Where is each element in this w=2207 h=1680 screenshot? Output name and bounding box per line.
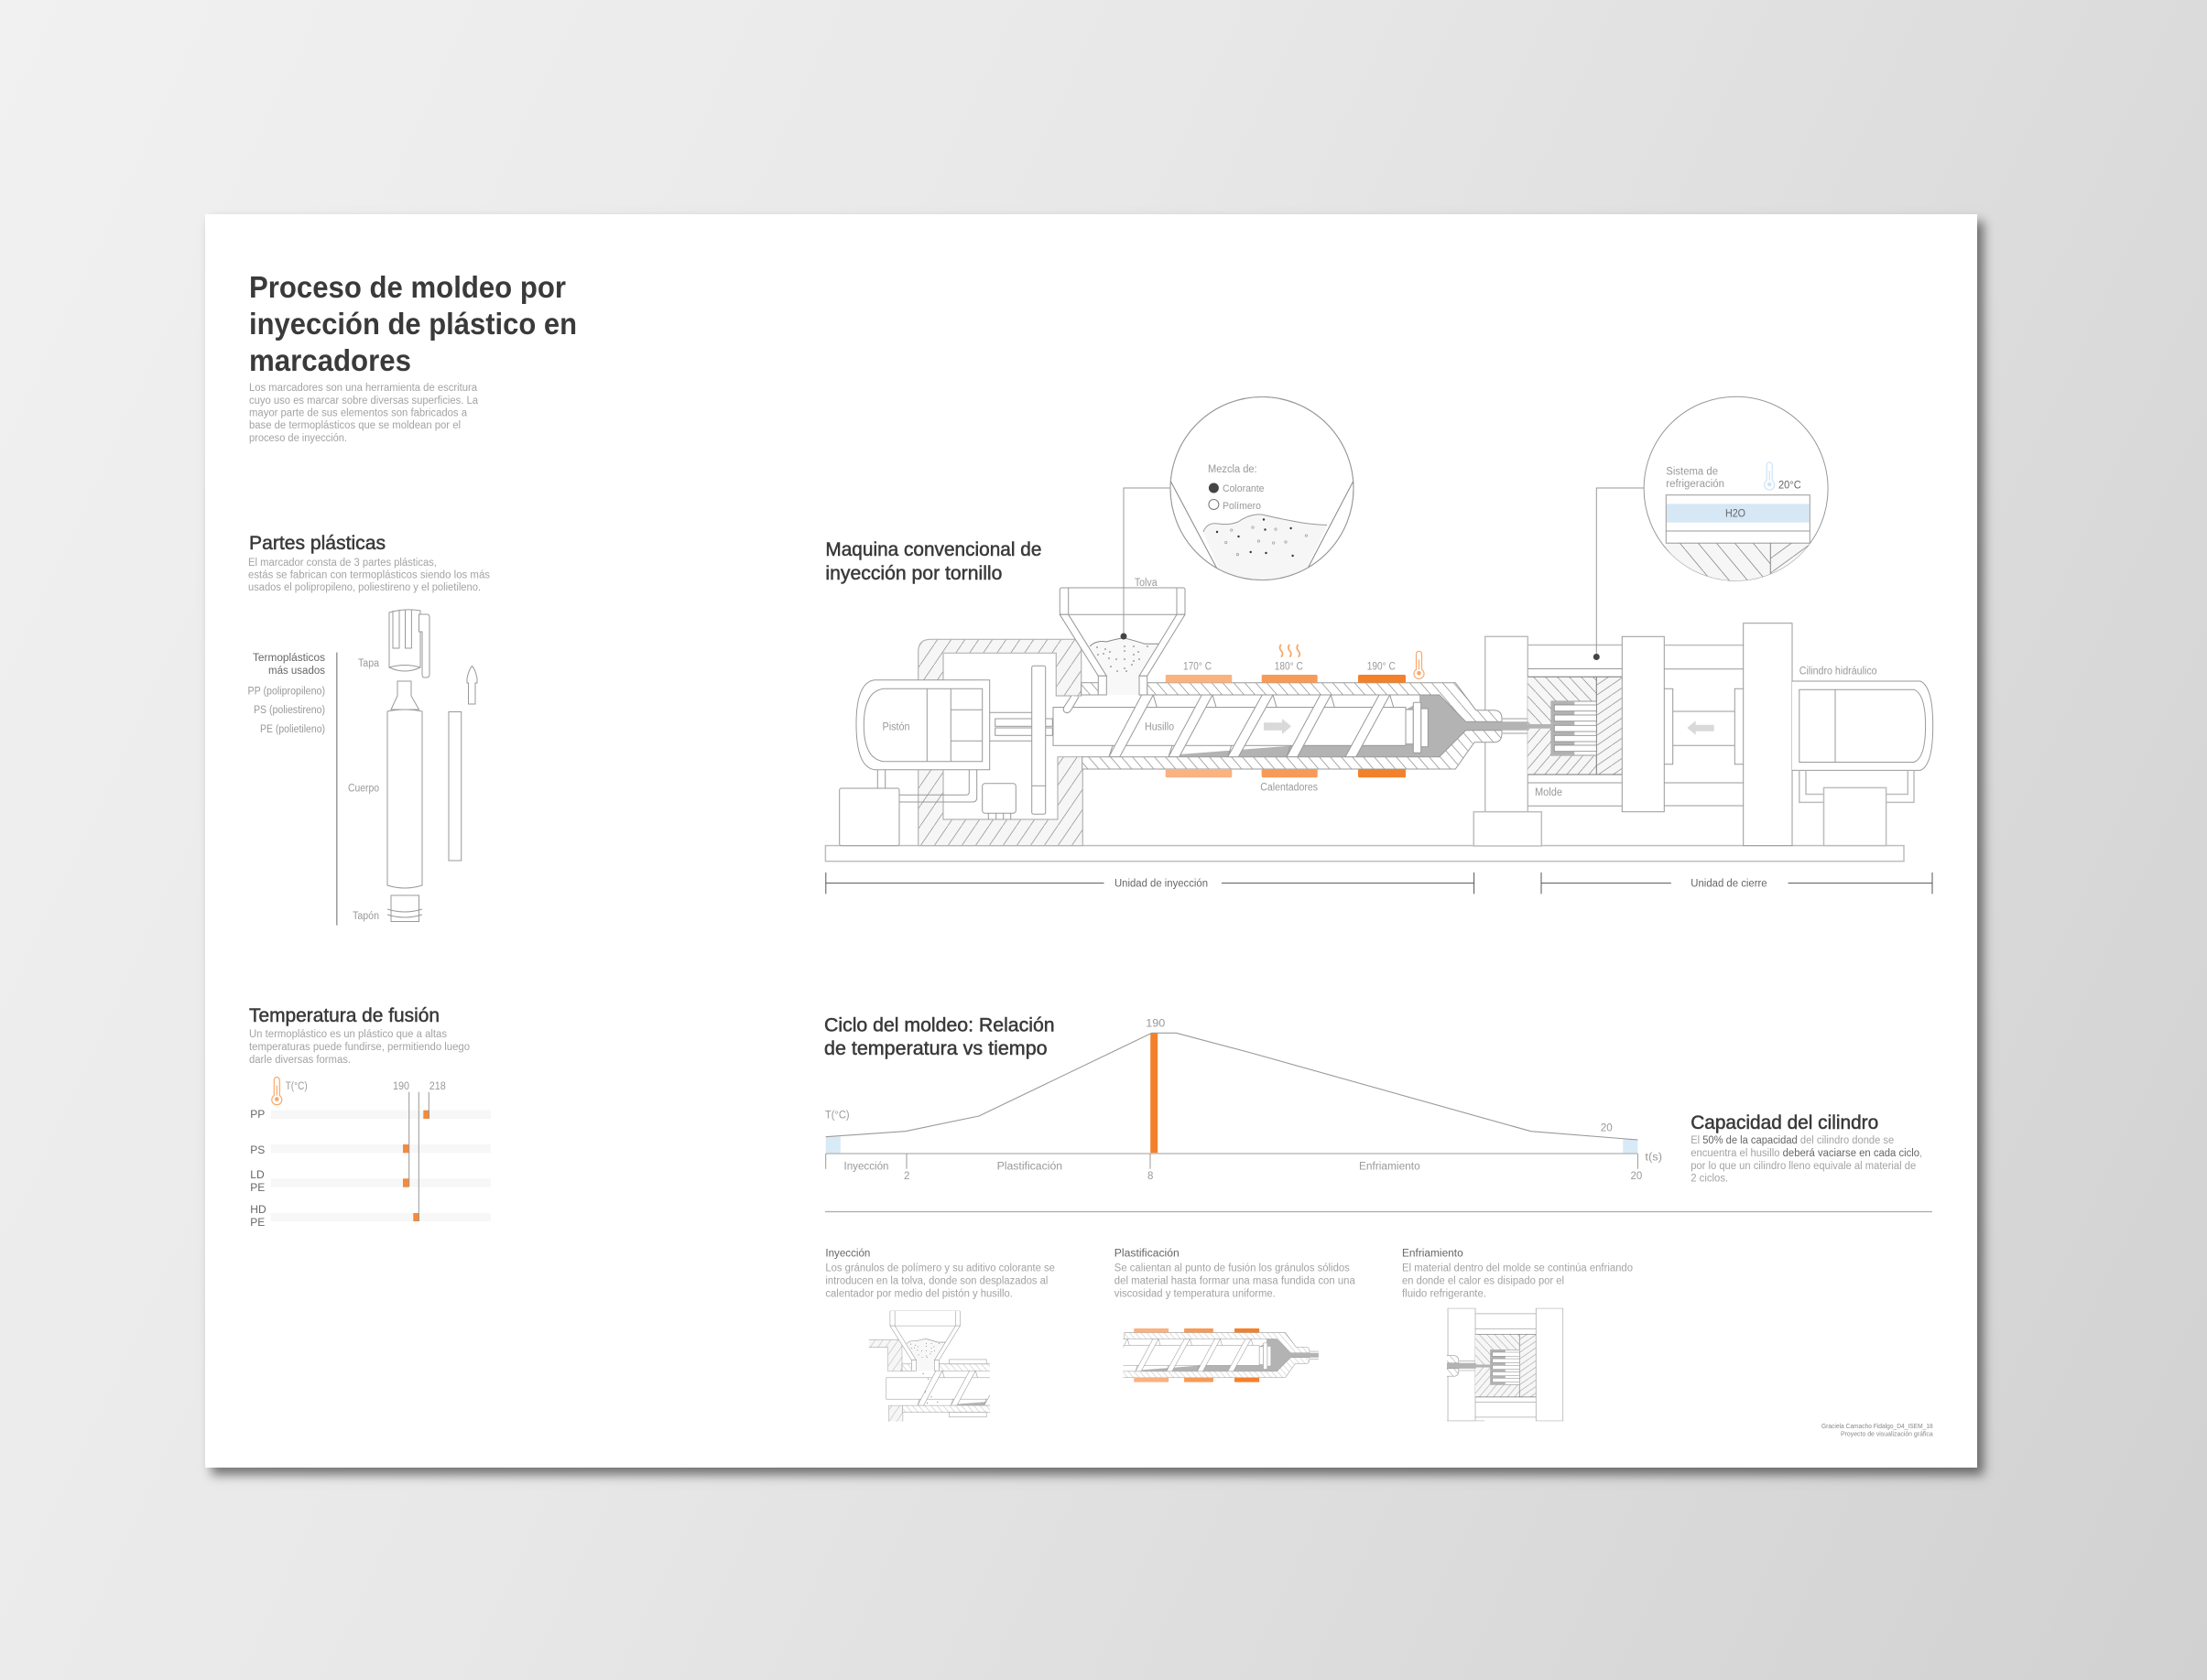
step text <box>1114 1263 1355 1300</box>
machine labels: 190° C <box>1367 661 1396 672</box>
intro text: proceso de inyección. <box>249 433 347 444</box>
step title: Enfriamiento <box>1402 1248 1463 1259</box>
machine labels: Husillo <box>1145 721 1174 732</box>
description <box>1691 1135 1922 1185</box>
unit brackets: Unidad de cierre <box>1691 879 1767 890</box>
machine labels: 180° C <box>1275 661 1303 672</box>
line chart: 2 <box>904 1171 909 1182</box>
temperature axis labels: T(°C) <box>286 1081 308 1092</box>
callout: mezcla: Mezcla de: <box>1208 464 1257 475</box>
description: El marcador consta de 3 partes plásticas, <box>248 558 437 569</box>
machine labels: 170° C <box>1183 661 1212 672</box>
melting chart: PE <box>250 1216 265 1229</box>
frame <box>919 639 1098 846</box>
part labels: Cuerpo <box>348 784 379 795</box>
temperature axis labels: 218 <box>429 1081 446 1092</box>
unit brackets: Unidad de inyección <box>1114 879 1208 890</box>
poster sheet <box>205 214 1977 1468</box>
panel: partes plásticas <box>247 533 490 926</box>
title <box>249 270 577 377</box>
callout: mezcla: Polímero <box>1223 501 1261 512</box>
description: por lo que un cilindro lleno equivale al material de <box>1691 1161 1916 1172</box>
description: usados el polipropileno, poliestireno y el polietileno. <box>248 582 481 593</box>
panel: enfriamiento step <box>1402 1249 1633 1421</box>
screw and barrel <box>1053 683 1528 769</box>
intro text: Los marcadores son una herramienta de escritura <box>249 383 478 394</box>
thermoplastics list: PS (poliestireno) <box>254 705 325 716</box>
line chart: Enfriamiento <box>1359 1161 1420 1172</box>
callout: refrigeración <box>1593 396 1828 660</box>
line chart: 190 <box>1146 1019 1165 1030</box>
mini diagram: barrel and heaters <box>1123 1328 1319 1382</box>
title: Proceso de moldeo por <box>249 270 566 304</box>
heading: Ciclo del moldeo: Relación <box>824 1014 1055 1035</box>
line chart <box>825 1019 1662 1182</box>
description <box>248 558 490 593</box>
thermoplastics list: Termoplásticos <box>253 653 325 664</box>
line chart: t(s) <box>1645 1152 1662 1163</box>
icon: heat waves <box>1280 645 1299 657</box>
temperature axis labels: 190 <box>393 1081 409 1092</box>
machine labels: Calentadores <box>1260 782 1318 793</box>
return arrow <box>1687 721 1714 735</box>
hydraulic cylinder: Cilindro hidráulico <box>1799 667 1877 677</box>
panel: intro <box>249 270 577 444</box>
intro text: cuyo uso es marcar sobre diversas superficies. La <box>249 396 479 406</box>
piston <box>856 680 1052 770</box>
step text: en donde el calor es disipado por el <box>1402 1275 1564 1286</box>
line chart: T(°C) <box>825 1110 850 1121</box>
hopper <box>1060 588 1185 695</box>
step title: Inyección <box>825 1248 870 1259</box>
machine base <box>825 846 1904 862</box>
line chart: Plastificación <box>997 1161 1062 1172</box>
panel: plastificación step <box>1114 1249 1355 1382</box>
panel: ciclo del moldeo <box>824 1014 1662 1182</box>
line chart: 20 <box>1601 1122 1613 1133</box>
description: Un termoplástico es un plástico que a altas <box>249 1029 447 1040</box>
callout: refrigeración: 20°C <box>1778 481 1801 492</box>
step title: Plastificación <box>1114 1248 1180 1259</box>
line chart: 8 <box>1147 1171 1153 1182</box>
injection machine <box>825 578 1933 862</box>
callout: mezcla: Colorante <box>1223 483 1264 494</box>
feed tube <box>1063 696 1079 713</box>
step text: viscosidad y temperatura uniforme. <box>1114 1289 1276 1300</box>
description: darle diversas formas. <box>249 1055 351 1066</box>
ink tube <box>449 712 462 861</box>
step text: del material hasta formar una masa fundida con una <box>1114 1275 1355 1286</box>
temperature axis labels <box>286 1081 446 1092</box>
thermoplastics list: PP (polipropileno) <box>247 687 325 698</box>
marker body <box>387 681 422 888</box>
panel: capacidad del cilindro <box>1691 1112 1922 1185</box>
title: inyección de plástico en <box>249 307 577 341</box>
mini diagram: mold <box>1447 1307 1564 1421</box>
description <box>249 1029 470 1066</box>
heading: Temperatura de fusión <box>249 1005 440 1026</box>
hydraulic cylinder <box>1792 667 1933 846</box>
thermoplastics list <box>247 653 325 735</box>
panel: temperatura de fusión <box>249 1005 491 1229</box>
heading: máquina: Maquina convencional de <box>825 539 1041 560</box>
step text: Se calientan al punto de fusión los gránulos sólidos <box>1114 1263 1350 1274</box>
description: El 50% de la capacidad del cilindro donde se <box>1691 1135 1894 1146</box>
description: 2 ciclos. <box>1691 1174 1728 1185</box>
heading: de temperatura vs tiempo <box>824 1038 1048 1059</box>
heading <box>824 1014 1055 1059</box>
heading: máquina: inyección por tornillo <box>825 563 1002 584</box>
icon: thermometer <box>272 1078 282 1105</box>
heading: máquina <box>825 539 1041 584</box>
hydraulic tank <box>840 788 899 846</box>
machine labels <box>1135 578 1562 798</box>
thermoplastics list: PE (polietileno) <box>260 724 325 735</box>
intro text: mayor parte de sus elementos son fabricados a <box>249 408 468 419</box>
unit brackets <box>826 873 1932 894</box>
callout: mezcla <box>1121 397 1354 639</box>
step text: introducen en la tolva, donde son desplazados al <box>825 1275 1048 1286</box>
melting chart: PE <box>250 1181 265 1194</box>
panel: inyección step <box>826 1249 1055 1422</box>
melting chart: PP <box>250 1108 265 1121</box>
marker plug <box>387 895 422 921</box>
footer credit: Graciela Camacho Fidalgo_D4_ISEM_18 <box>1821 1424 1933 1430</box>
heaters <box>1166 675 1406 777</box>
part labels: Tapa <box>358 658 380 669</box>
description: estás se fabrican con termoplásticos siendo los más <box>248 569 490 580</box>
part labels: Tapón <box>353 911 379 922</box>
clamping unit <box>1473 636 1664 846</box>
step text <box>825 1263 1055 1300</box>
description: encuentra el husillo deberá vaciarse en cada ciclo, <box>1691 1148 1922 1159</box>
thermoplastics list: más usados <box>268 666 325 677</box>
melting chart: PS <box>250 1143 265 1156</box>
mini diagram: hopper and screw <box>868 1311 990 1422</box>
step text: fluido refrigerante. <box>1402 1289 1486 1300</box>
guide bar <box>1032 666 1046 814</box>
icon: thermometer <box>1414 651 1424 678</box>
heading: Partes plásticas <box>249 533 386 554</box>
callout: refrigeración: Sistema de <box>1666 467 1718 478</box>
machine labels: Tolva <box>1135 578 1158 589</box>
marker tip <box>467 667 477 704</box>
step text: El material dentro del molde se continúa enfriando <box>1402 1263 1633 1274</box>
title: marcadores <box>249 343 411 377</box>
flow arrow <box>1264 719 1291 734</box>
step text <box>1402 1263 1633 1300</box>
melting chart <box>250 1092 491 1229</box>
piston: Pistón <box>883 721 910 732</box>
footer credit: Proyecto de visualización gráfica <box>1841 1432 1933 1437</box>
intro text: base de termoplásticos que se moldean por el <box>249 420 461 431</box>
callout: refrigeración: H2O <box>1725 508 1745 519</box>
intro text <box>249 383 479 444</box>
callout: refrigeración: refrigeración <box>1666 479 1724 490</box>
part labels <box>348 658 380 922</box>
marker cap <box>389 610 429 677</box>
tie bars and rear platen <box>1664 623 1792 846</box>
description: temperaturas puede fundirse, permitiendo luego <box>249 1042 470 1053</box>
line chart: 20 <box>1630 1171 1642 1182</box>
melting chart: HD <box>250 1203 266 1216</box>
machine labels: Molde <box>1535 787 1562 798</box>
step text: calentador por medio del pistón y husillo. <box>825 1289 1013 1300</box>
footer credit <box>1821 1424 1933 1437</box>
heading: Capacidad del cilindro <box>1691 1112 1878 1133</box>
step text: Los gránulos de polímero y su aditivo colorante se <box>825 1263 1055 1274</box>
melting chart: LD <box>250 1168 265 1181</box>
control box <box>983 784 1016 819</box>
piston pipes <box>877 770 977 802</box>
line chart: Inyección <box>844 1161 888 1172</box>
